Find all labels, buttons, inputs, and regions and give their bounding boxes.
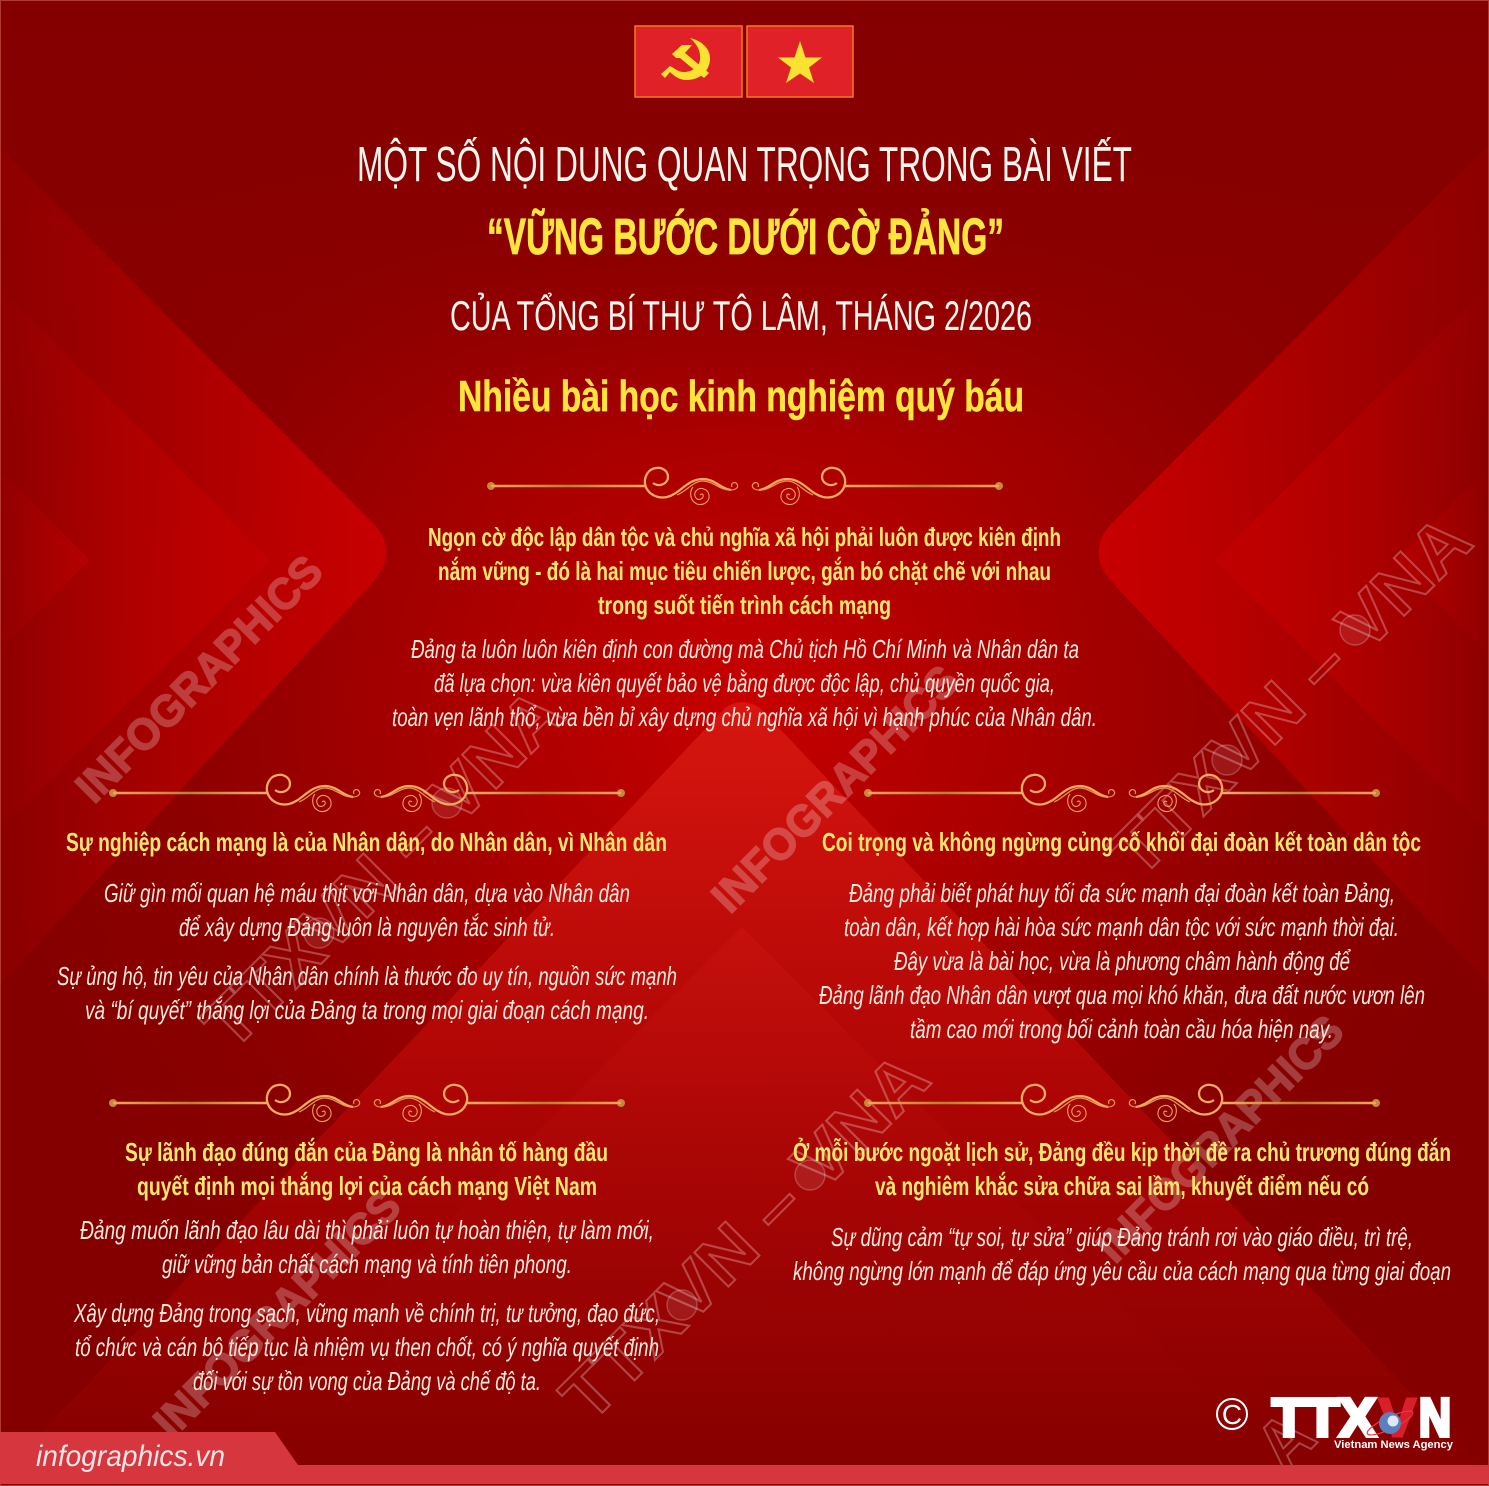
text block: main lesson: đã lựa chọn: vừa kiên quyết bảo vệ bằng được độc lập, chủ quyền quốc gia, <box>434 668 1055 698</box>
text block: main lesson: toàn vẹn lãnh thổ, vừa bền bỉ xây dựng chủ nghĩa xã hội vì hạnh phúc của Nhân dân. <box>392 702 1097 732</box>
watermarks: INFOGRAPHICS <box>702 656 968 922</box>
ornament divider: upper left <box>109 775 625 812</box>
text block: party leadership: tổ chức và cán bộ tiếp tục là nhiệm vụ then chốt, có ý nghĩa quyết định <box>75 1332 659 1362</box>
text block: main lesson: Ngọn cờ độc lập dân tộc và chủ nghĩa xã hội phải luôn được kiên định <box>428 522 1061 552</box>
icon: copyright <box>1217 1399 1247 1430</box>
text block: turning points <box>793 1136 1451 1286</box>
logo: TTXVN Vietnam News Agency: Vietnam News Agency <box>1334 1439 1454 1451</box>
ornament divider: lower right <box>864 1085 1380 1122</box>
text block: people: Sự ủng hộ, tin yêu của Nhân dân chính là thước đo uy tín, nguồn sức mạnh <box>57 961 677 991</box>
title: CỦA TỔNG BÍ THƯ TÔ LÂM, THÁNG 2/2026 <box>450 290 1032 339</box>
logo: TTXVN Vietnam News Agency: N <box>1419 1388 1451 1448</box>
watermarks: TTXVN – VNA <box>545 1038 944 1436</box>
text block: people: Giữ gìn mối quan hệ máu thịt với Nhân dân, dựa vào Nhân dân <box>104 878 630 908</box>
title: Nhiều bài học kinh nghiệm quý báu <box>458 372 1024 421</box>
text block: party leadership: giữ vững bản chất cách mạng và tính tiên phong. <box>162 1249 572 1279</box>
text block: main lesson: Đảng ta luôn luôn kiên định con đường mà Chủ tịch Hồ Chí Minh và Nhân dân ta <box>411 634 1079 664</box>
watermarks: A <box>1240 1397 1330 1486</box>
icon: party flag <box>635 26 742 97</box>
text block: people: và “bí quyết” thắng lợi của Đảng ta trong mọi giai đoạn cách mạng. <box>85 995 649 1025</box>
watermarks: INFOGRAPHICS <box>144 1181 410 1447</box>
watermarks: INFOGRAPHICS <box>1087 1006 1353 1272</box>
text block: party leadership <box>73 1137 660 1396</box>
text block: party leadership: Sự lãnh đạo đúng đắn của Đảng là nhân tố hàng đầu <box>125 1137 608 1167</box>
text block: main lesson: trong suốt tiến trình cách mạng <box>598 590 891 620</box>
ornament divider: upper right <box>864 775 1380 812</box>
text block: party leadership: Đảng muốn lãnh đạo lâu dài thì phải luôn tự hoàn thiện, tự làm mới, <box>80 1215 654 1245</box>
watermarks: INFOGRAPHICS <box>66 546 332 812</box>
ornament divider: main <box>487 468 1003 505</box>
text block: party leadership: đối với sự tồn vong của Đảng và chế độ ta. <box>193 1366 541 1396</box>
logo: TTXVN Vietnam News Agency: V <box>1379 1388 1416 1448</box>
text block: great unity: tầm cao mới trong bối cảnh toàn cầu hóa hiện nay. <box>910 1014 1333 1044</box>
title <box>357 137 1132 421</box>
icon: copyright: C <box>1222 1399 1242 1430</box>
text block: party leadership: quyết định mọi thắng lợi của cách mạng Việt Nam <box>137 1171 597 1201</box>
text block: people <box>57 827 677 1025</box>
title: “VỮNG BƯỚC DƯỚI CỜ ĐẢNG” <box>487 207 1004 265</box>
text block: people: để xây dựng Đảng luôn là nguyên tắc sinh tử. <box>179 912 555 942</box>
text block: party leadership: Xây dựng Đảng trong sạch, vững mạnh về chính trị, tư tưởng, đạo đức, <box>73 1298 660 1328</box>
watermarks <box>66 500 1486 1486</box>
ornament divider: lower left <box>109 1085 625 1122</box>
watermarks: TTXVN – VNA <box>1095 500 1486 891</box>
watermarks: TTXVN – VNA <box>187 673 578 1064</box>
text block: main lesson <box>392 522 1097 732</box>
text block: main lesson: nắm vững - đó là hai mục tiêu chiến lược, gắn bó chặt chẽ với nhau <box>438 556 1051 586</box>
text block: people: Sự nghiệp cách mạng là của Nhân dân, do Nhân dân, vì Nhân dân <box>66 827 667 857</box>
logo: TTXVN Vietnam News Agency: TTX <box>1272 1388 1376 1448</box>
bottom band with infographics.vn tab: infographics.vn <box>36 1440 225 1473</box>
bottom band with infographics.vn tab <box>0 1432 1489 1484</box>
text block: great unity <box>819 827 1425 1044</box>
logo: TTXVN Vietnam News Agency <box>1272 1388 1454 1451</box>
icon: national flag with star <box>747 26 853 97</box>
